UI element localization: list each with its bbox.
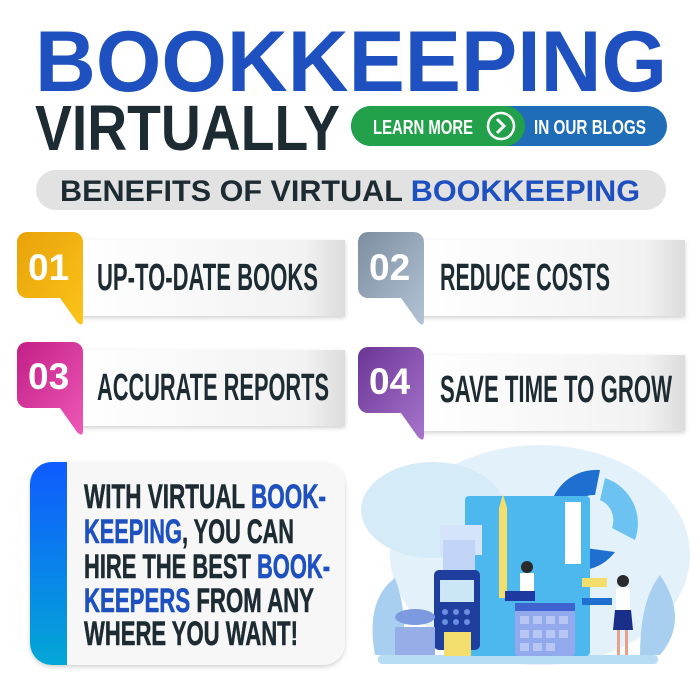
- receipt: [440, 525, 482, 555]
- card 01: [17, 232, 345, 325]
- button: learn more in our blogs: [351, 106, 667, 146]
- heading pill: benefits: BENEFITS OF VIRTUAL BOOKKEEPING: [60, 175, 640, 208]
- man: [521, 561, 533, 573]
- pencil: [499, 508, 507, 598]
- calendar: [515, 603, 575, 656]
- woman: [617, 575, 629, 587]
- button: learn more in our blogs: IN OUR BLOGS: [534, 117, 646, 139]
- title: [35, 14, 667, 164]
- donut chart: [552, 470, 600, 505]
- illustration: bookkeeping scene: [361, 445, 690, 665]
- card 04: [358, 347, 685, 440]
- coins: [395, 609, 435, 625]
- callout: hire best bookkeepers: KEEPING, YOU CAN: [84, 513, 294, 551]
- card 03: 03: [28, 356, 69, 397]
- card 04: 04: [369, 361, 411, 402]
- card 01: UP-TO-DATE BOOKS: [97, 257, 318, 299]
- button: learn more in our blogs: LEARN MORE: [373, 117, 473, 139]
- card terminal: [434, 570, 480, 650]
- card 03: ACCURATE REPORTS: [97, 367, 329, 409]
- icon: arrow circle: [488, 113, 514, 139]
- title: BOOKKEEPING: [35, 14, 667, 110]
- callout: hire best bookkeepers: HIRE THE BEST BOOK-: [84, 548, 330, 586]
- leaves: [372, 578, 404, 655]
- card 03: [17, 342, 345, 435]
- callout: hire best bookkeepers: WITH VIRTUAL BOOK-: [84, 478, 326, 516]
- card 02: [358, 232, 685, 325]
- callout: hire best bookkeepers: KEEPERS FROM ANY: [84, 582, 314, 620]
- callout: hire best bookkeepers: [30, 462, 345, 665]
- card 01: 01: [28, 247, 69, 288]
- card 02: 02: [369, 247, 410, 288]
- folder: [465, 496, 590, 656]
- subtitle: virtually: VIRTUALLY: [35, 92, 340, 164]
- callout: hire best bookkeepers: WHERE YOU WANT!: [84, 615, 298, 653]
